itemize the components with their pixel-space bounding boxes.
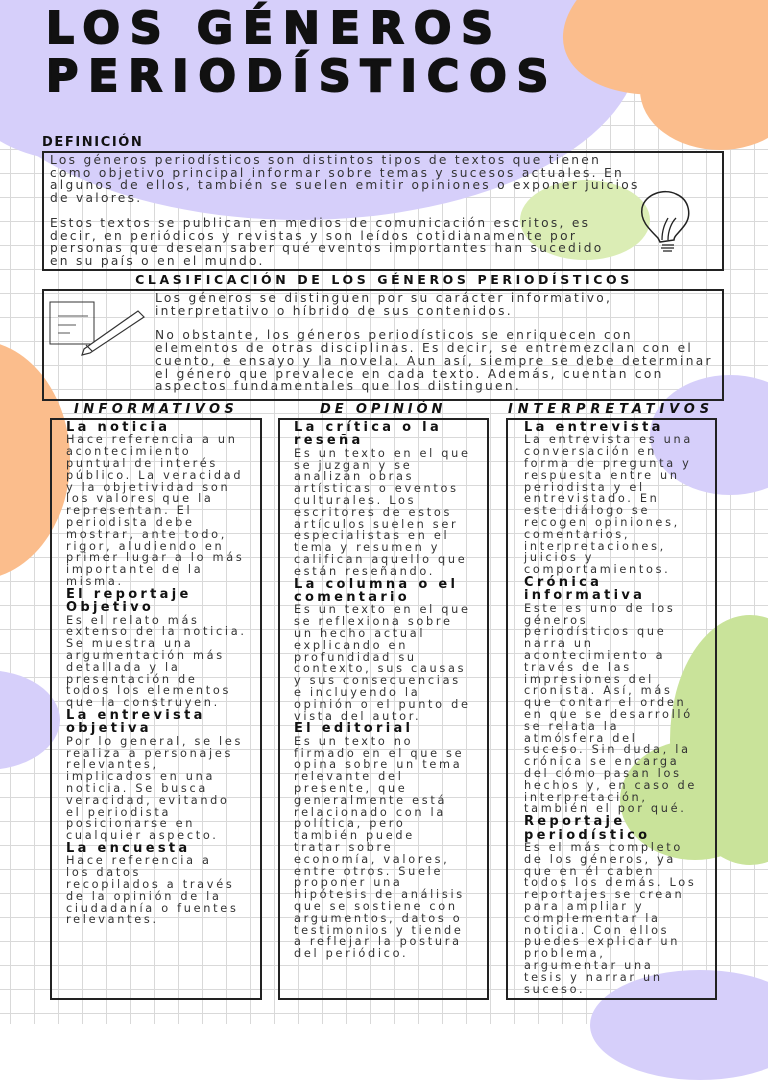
panel: informativos: Se muestra una [66,637,193,650]
panel: de opinión: profundidad su [294,651,417,664]
panel: interpretativos: tesis y narrar un [524,971,663,984]
panel: informativos: representan. El [66,504,192,517]
panel: informativos: relevantes, [66,758,159,771]
panel: informativos: importante de la [66,563,203,576]
panel: interpretativos: suceso. Sin duda, la [524,743,691,756]
panel: de opinión: contexto, sus causas [294,662,466,675]
panel: interpretativos: que en él caben [524,865,655,878]
panel: definición [42,151,724,271]
panel: informativos [50,418,262,1000]
panel: definición: Estos textos se publican en medios de comunicación escritos, es [50,216,590,230]
panel: de opinión: se reflexiona sobre [294,615,453,628]
panel: de opinión: analizan obras [294,470,414,483]
panel: definición: en su país o en el mundo. [50,254,265,268]
panel: de opinión: artículos suelen ser [294,518,458,531]
panel: de opinión: culturales. Los [294,494,416,507]
panel: informativos: periodista debe [66,516,195,529]
panel: de opinión: están reseñando. Es un texto en el que [294,565,471,616]
panel: clasificación: No obstante, los géneros periodísticos se enriquecen con [155,328,633,342]
panel: de opinión: escritores de estos [294,506,452,519]
panel: informativos: veracidad, evitando [66,794,230,807]
panel: de opinión: un hecho actual [294,627,425,640]
panel: de opinión: relevante del [294,770,404,783]
panel: de opinión: y sus consecuencias [294,674,461,687]
heading: de opinión: DE OPINIÓN [320,402,446,417]
panel: informativos: los datos [66,866,141,879]
panel: informativos: todos los elementos [66,684,231,697]
panel: definición: decir, en periódicos y revistas y son leídos cotidianamente por [50,229,577,243]
panel: interpretativos: acontecimiento a [524,649,665,662]
panel: interpretativos: impresiones del [524,673,654,686]
panel: interpretativos: juicios y [524,551,594,564]
panel: definición: algunos de ellos, también se suelen emitir opiniones o exponer juicios [50,178,640,192]
panel: informativos: rigor, aludiendo en [66,540,224,553]
panel: interpretativos: La entrevista [524,420,664,435]
panel: informativos: acontecimiento [66,445,191,458]
panel: interpretativos: todos los demás. Los [524,876,696,889]
panel: de opinión: vista del autor. Es un texto no [294,710,421,748]
panel: interpretativos: comportamientos. Este es uno de los [524,563,676,615]
panel: de opinión: política, pero [294,817,405,830]
panel: interpretativos: respuesta entre un [524,469,680,482]
panel: interpretativos: Reportaje [524,814,625,829]
panel: informativos: público. La veracidad [66,469,243,482]
panel: interpretativos: informativa [524,588,645,603]
panel: de opinión: e incluyendo la [294,686,420,699]
panel: informativos: extenso de la noticia. [66,625,247,638]
panel: interpretativos: hechos y, en caso de [524,779,697,792]
panel: interpretativos: este diálogo se [524,504,650,517]
panel: clasificación: aspectos fundamentales que los distinguen. [155,379,521,393]
heading: clasificación: CLASIFICACIÓN DE LOS GÉNEROS PERIODÍSTICOS [135,272,633,287]
panel: interpretativos: puedes explicar un [524,935,680,948]
panel: interpretativos: también el por qué. Es el más completo [524,802,687,854]
panel: informativos: relevantes. [66,913,159,926]
title: LOS GÉNEROS [46,3,503,54]
panel: de opinión: generalmente está [294,794,447,807]
panel: de opinión: del periódico. [294,947,408,960]
panel: interpretativos: problema, [524,947,606,960]
panel: interpretativos: reportajes se crean [524,888,684,901]
panel: definición: de valores. [50,191,142,205]
panel: de opinión: también puede [294,829,415,842]
panel: clasificación: elementos de otras disciplinas. Es decir, se entremezclan con el [155,341,693,355]
panel: de opinión: se juzgan y se [294,459,412,472]
panel: de opinión: presente, que [294,782,407,795]
panel: de opinión: hipótesis de análisis [294,888,465,901]
panel: interpretativos: través de las [524,661,632,674]
panel: informativos: noticia. Se busca [66,782,208,795]
panel: de opinión: opina sobre un tema [294,758,462,771]
panel: interpretativos: cronista. Así, más [524,684,673,697]
panel: informativos: que la construyen. Por lo general, se les [66,696,243,748]
panel: de opinión: El editorial [294,721,413,736]
panel: interpretativos: argumentar una [524,959,653,972]
panel: clasificación: cuento, e ensayo y la novela. Aun así, siempre se debe determinar [155,354,713,368]
panel: informativos: El reportaje [66,587,192,602]
panel: de opinión: especialistas en el [294,529,449,542]
panel: informativos: presentación de [66,673,198,686]
panel: de opinión: que se sostiene con [294,900,458,913]
panel: interpretativos: se relata la [524,720,619,733]
panel: informativos: ciudadanía o fuentes [66,902,239,915]
panel: informativos: puntual de interés [66,457,218,470]
panel: de opinión: explicando en [294,639,408,652]
icon: note and pencil [50,302,145,356]
panel: definición: Los géneros periodísticos son distintos tipos de textos que tienen [50,153,601,167]
panel: interpretativos: conversación en [524,445,657,458]
icon: lightbulb [640,190,690,252]
panel: de opinión: firmado en el que se [294,747,464,760]
panel: definición: como objetivo principal informar sobre temas y sucesos actuales. En [50,166,624,180]
panel: clasificación [42,289,724,401]
panel: informativos: La entrevista [66,708,206,723]
panel: interpretativos: complementar la [524,912,661,925]
panel: interpretativos: del cómo pasan los [524,767,682,780]
panel: interpretativos: atmósfera del [524,732,638,745]
panel: informativos: y la objetividad son [66,481,230,494]
panel: informativos: objetiva [66,721,152,736]
panel: interpretativos: La entrevista es una [524,433,693,446]
panel: de opinión: artísticas o eventos [294,482,459,495]
panel: interpretativos: interpretación, [524,791,648,804]
panel: de opinión: tratar sobre [294,841,393,854]
title [46,2,558,102]
panel: clasificación: el género que prevalece en cada texto. Además, cuentan con [155,367,664,381]
panel: interpretativos: periodísticos que [524,625,666,638]
heading: informativos: INFORMATIVOS [74,402,238,417]
panel: de opinión: opinión o el punto de [294,698,471,711]
panel: interpretativos: suceso. [524,982,585,996]
panel: de opinión: tema y resumen y [294,541,440,554]
panel: de opinión: a reflejar la postura [294,935,462,948]
panel: interpretativos: interpretaciones, [524,540,666,553]
panel: de opinión: La crítica o la [294,420,442,435]
panel: de opinión: entre otros. Suele [294,865,443,878]
panel: interpretativos: recogen opiniones, [524,516,680,529]
panel: informativos: La noticia [66,420,170,435]
panel: de opinión: proponer una [294,876,403,889]
heading: interpretativos: INTERPRETATIVOS [508,402,714,417]
panel: informativos: primer lugar a lo más [66,551,244,564]
panel: informativos: el periodista [66,806,171,819]
panel: de opinión: relacionado con la [294,806,446,819]
panel: de opinión: economía, valores, [294,853,449,866]
panel: interpretativos: entrevistado. En [524,492,660,505]
panel: informativos: La encuesta [66,841,190,856]
panel: interpretativos: que contar el orden [524,696,686,709]
panel: interpretativos: noticia. Con ellos [524,924,669,937]
panel: informativos: misma. Es el relato más [66,575,200,627]
panel: informativos: recopilados a través [66,878,234,891]
panel: interpretativos: forma de pregunta y [524,457,692,470]
panel: interpretativos: comentarios, [524,528,630,541]
panel: clasificación: Los géneros se distinguen por su carácter informativo, [155,291,612,305]
panel: informativos: los valores que la [66,492,214,505]
panel: de opinión: argumentos, datos o [294,912,462,925]
panel: interpretativos: para ampliar y [524,900,644,913]
panel: informativos: realiza a personajes [66,747,233,760]
panel: informativos: de la opinión de la [66,890,222,903]
panel: de opinión: reseña [294,433,364,448]
panel: interpretativos: en que se desarrolló [524,708,693,721]
panel: informativos: implicados en una [66,770,215,783]
panel: de opinión: testimonios y tiende [294,924,464,937]
title: PERIODÍSTICOS [46,51,558,102]
panel: de opinión: califican aquello que [294,553,467,566]
panel: clasificación: interpretativo o híbrido de sus contenidos. [155,304,513,318]
panel: de opinión: La columna o el [294,577,458,592]
panel: informativos: detallada y la [66,661,180,674]
panel: interpretativos: géneros [524,614,588,627]
panel: interpretativos [506,418,717,1000]
panel: de opinión: Es un texto en el que [294,447,471,460]
panel: informativos: cualquier aspecto. Hace referencia a [66,829,219,867]
panel: definición: personas que desean saber qué eventos importantes han sucedido [50,241,604,255]
panel: informativos: Hace referencia a un [66,433,238,446]
panel: interpretativos: crónica se encarga [524,755,679,768]
panel: interpretativos: de los géneros, ya [524,853,676,866]
panel: informativos: mostrar, ante todo, [66,528,227,541]
panel: informativos: Objetivo [66,600,154,615]
panel: informativos: posicionarse en [66,817,195,830]
panel: de opinión [278,418,489,1000]
panel: interpretativos: periodista y el [524,481,645,494]
panel: informativos: argumentación más [66,649,225,662]
panel: interpretativos: narra un [524,637,594,650]
panel: de opinión: comentario [294,590,410,605]
panel: interpretativos: periodístico [524,828,650,843]
heading: definición: DEFINICIÓN [42,135,143,150]
panel: interpretativos: Crónica [524,575,602,590]
